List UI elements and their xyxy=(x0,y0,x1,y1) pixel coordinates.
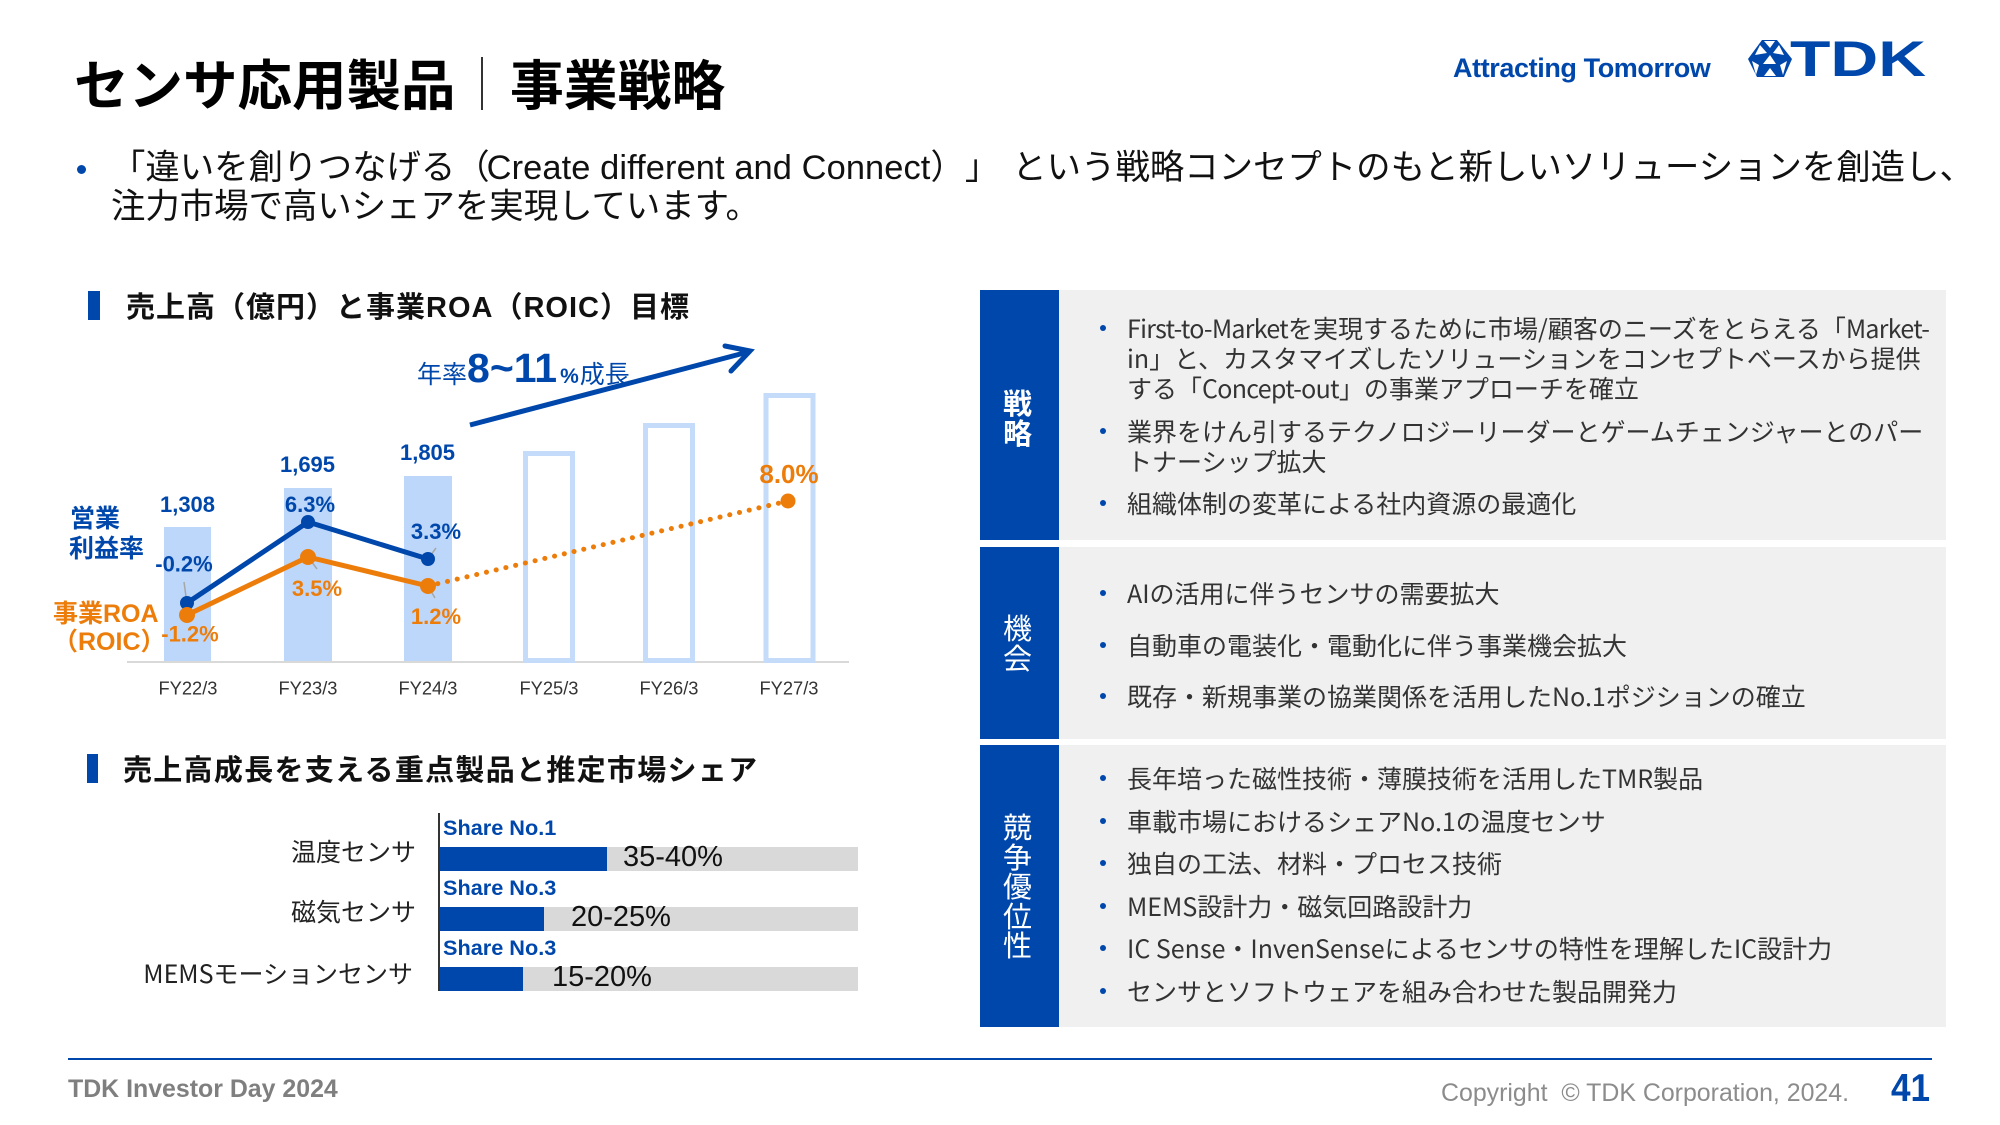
panel label: strategy: 略 xyxy=(1003,410,1032,452)
ROA values: 3.5% xyxy=(292,576,342,601)
lead text: 「違いを創りつなげる（Create different and Connect）」 という戦略コンセプトのもと新しいソリューションを創造し、 xyxy=(111,149,1974,187)
row: temperature sensor xyxy=(291,815,858,873)
market share chart xyxy=(143,813,858,993)
bar and line chart xyxy=(53,344,849,698)
panel label: competitive advantages: 位 xyxy=(1003,894,1032,936)
row: magnetic sensor: 磁気センサ xyxy=(291,893,416,929)
ROA values: 1.2% xyxy=(411,604,461,629)
title xyxy=(74,56,725,117)
sales values: 1,695 xyxy=(280,452,335,477)
advantage item 6: センサとソフトウェアを組み合わせた製品開発力 xyxy=(1127,973,1677,1009)
strategy item 2: 業界をけん引するテクノロジーリーダーとゲームチェンジャーとのパー xyxy=(1127,413,1923,449)
title: 事業戦略 xyxy=(510,57,725,117)
advantage item 4: MEMS設計力・磁気回路設計力 xyxy=(1127,888,1472,924)
panel label: competitive advantages: 争 xyxy=(1003,834,1032,876)
lead text: 注力市場で高いシェアを実現しています。 xyxy=(111,188,760,226)
advantage item 5: IC Sense・InvenSenseによるセンサの特性を理解したIC設計力 xyxy=(1127,930,1832,966)
series label: operating margin xyxy=(69,505,144,563)
panel label: strategy: 戦 xyxy=(1003,381,1032,423)
panel label: competitive advantages: 優 xyxy=(1003,864,1032,906)
strategy item 2: トナーシップ拡大 xyxy=(1127,443,1327,479)
opportunity item 2: 自動車の電装化・電動化に伴う事業機会拡大 xyxy=(1127,627,1627,663)
footer rule xyxy=(68,1058,1932,1060)
panel: strategy xyxy=(980,290,1946,540)
year labels: FY23/3 xyxy=(279,678,337,698)
year labels xyxy=(159,678,818,698)
panel label: strategy xyxy=(980,290,1059,540)
operating margin values: 3.3% xyxy=(411,519,461,544)
strategy item 1: First-to-Marketを実現するために市場/顧客のニーズをとらえる「Market- xyxy=(1127,310,1929,346)
panel label: competitive advantages: 競 xyxy=(1003,805,1032,847)
footer: copyright: Copyright © TDK Corporation, 2024. xyxy=(1441,1079,1849,1107)
panel: competitive advantages xyxy=(980,745,1946,1027)
advantage item 2: 車載市場におけるシェアNo.1の温度センサ xyxy=(1127,803,1606,839)
panel label: opportunities: 会 xyxy=(1003,636,1032,678)
title: センサ応用製品 xyxy=(74,56,456,117)
row: temperature sensor: 35-40% xyxy=(623,841,723,873)
strategy item 1 xyxy=(1127,313,1929,403)
strategy item 1: する「Concept-out」の事業アプローチを確立 xyxy=(1127,370,1639,406)
axis baseline xyxy=(127,661,849,663)
panel label: competitive advantages xyxy=(980,745,1059,1027)
panel label: opportunities xyxy=(980,547,1059,739)
actual sales bars xyxy=(164,476,452,662)
panel: opportunities xyxy=(980,547,1946,739)
row: MEMS motion sensor xyxy=(143,935,858,993)
row: MEMS motion sensor: Share No.3 xyxy=(443,935,556,960)
icon: TDK hexagon mark xyxy=(1748,40,1792,77)
heading: sales and ROA targets: 売上高（億円）と事業ROA（ROIC）目標 xyxy=(126,292,690,324)
row: temperature sensor: 温度センサ xyxy=(291,833,416,869)
sales values xyxy=(160,440,455,517)
footer: event name: TDK Investor Day 2024 xyxy=(68,1075,338,1103)
strategy item 3: 組織体制の変革による社内資源の最適化 xyxy=(1127,485,1576,521)
opportunity item 1: AIの活用に伴うセンサの需要拡大 xyxy=(1127,575,1500,611)
series label: ROA: 事業ROA xyxy=(53,600,159,628)
growth label: 年率 xyxy=(417,361,467,389)
growth label: 成長 xyxy=(580,361,630,389)
row: MEMS motion sensor: 15-20% xyxy=(552,961,652,993)
advantage item 3: 独自の工法、材料・プロセス技術 xyxy=(1127,845,1502,881)
ROA values xyxy=(161,459,819,646)
opportunity item 3: 既存・新規事業の協業関係を活用したNo.1ポジションの確立 xyxy=(1127,678,1806,714)
growth label: % xyxy=(560,365,579,388)
growth arrow xyxy=(470,346,750,425)
row: magnetic sensor: Share No.3 xyxy=(443,875,556,900)
series label: operating margin: 営業 xyxy=(70,505,120,533)
series label: ROA xyxy=(53,600,166,656)
page number: 41 xyxy=(1891,1067,1930,1110)
axis line xyxy=(438,813,440,991)
heading: key products and market share: 売上高成長を支える重点製品と推定市場シェア xyxy=(123,755,758,787)
logo: TDK xyxy=(1748,36,1926,80)
year labels: FY25/3 xyxy=(520,678,578,698)
row: temperature sensor: Share No.1 xyxy=(443,815,556,840)
operating margin values xyxy=(155,492,461,576)
advantage item 1: 長年培った磁性技術・薄膜技術を活用したTMR製品 xyxy=(1127,760,1703,796)
row: magnetic sensor xyxy=(291,875,858,933)
row: magnetic sensor: 20-25% xyxy=(571,901,671,933)
year labels: FY22/3 xyxy=(159,678,217,698)
sales values: 1,308 xyxy=(160,492,215,517)
year labels: FY27/3 xyxy=(760,678,818,698)
sales values: 1,805 xyxy=(400,440,455,465)
series label: operating margin: 利益率 xyxy=(69,535,144,563)
operating margin values: -0.2% xyxy=(155,552,213,576)
growth label: 8~11 xyxy=(467,345,557,391)
year labels: FY26/3 xyxy=(640,678,698,698)
panel label: opportunities: 機 xyxy=(1003,606,1032,648)
lead text xyxy=(77,149,1974,226)
leader lines xyxy=(184,548,436,604)
operating margin line xyxy=(180,515,435,610)
ROA line xyxy=(179,494,796,623)
tagline: Attracting Tomorrow: Attracting Tomorrow xyxy=(1453,53,1710,83)
target sales bars xyxy=(526,396,813,660)
panel label: competitive advantages: 性 xyxy=(1003,923,1032,965)
year labels: FY24/3 xyxy=(399,678,457,698)
series label: ROA: （ROIC） xyxy=(53,628,166,656)
ROA values: -1.2% xyxy=(161,622,219,646)
strategy item 2 xyxy=(1127,416,1923,476)
ROA values: 8.0% xyxy=(759,459,819,489)
row: MEMS motion sensor: MEMSモーションセンサ xyxy=(143,955,413,991)
strategy item 1: in」と、カスタマイズしたソリューションをコンセプトベースから提供 xyxy=(1127,340,1921,376)
operating margin values: 6.3% xyxy=(285,492,335,517)
